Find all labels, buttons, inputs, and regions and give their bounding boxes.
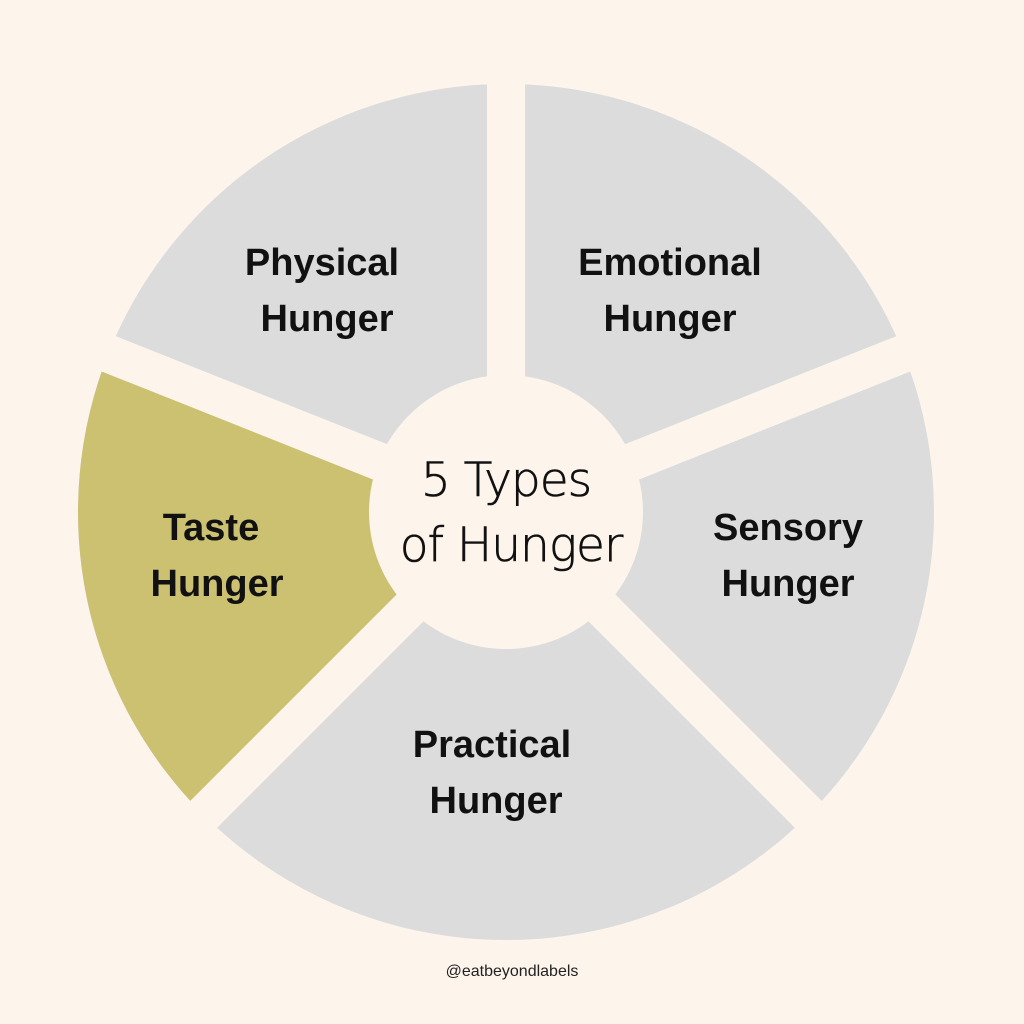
- label: sensory hunger: Sensory: [713, 507, 863, 549]
- label: practical hunger: Practical: [413, 724, 571, 766]
- label: sensory hunger: Hunger: [722, 563, 855, 605]
- label: taste hunger: Taste: [163, 507, 259, 549]
- center title: 5 Types: [421, 453, 591, 508]
- label: physical hunger: Hunger: [260, 298, 394, 340]
- segment: taste hunger highlight: [78, 354, 506, 815]
- label: practical hunger: Hunger: [430, 780, 563, 822]
- center title: of Hunger: [400, 518, 624, 573]
- label: emotional hunger: Hunger: [604, 298, 737, 340]
- footer handle: @eatbeyondlabels: [446, 963, 578, 980]
- label: emotional hunger: Emotional: [578, 242, 762, 284]
- label: physical hunger: Physical: [245, 242, 399, 284]
- label: taste hunger: Hunger: [150, 563, 284, 605]
- pie chart: 5 types of hunger: [78, 60, 934, 940]
